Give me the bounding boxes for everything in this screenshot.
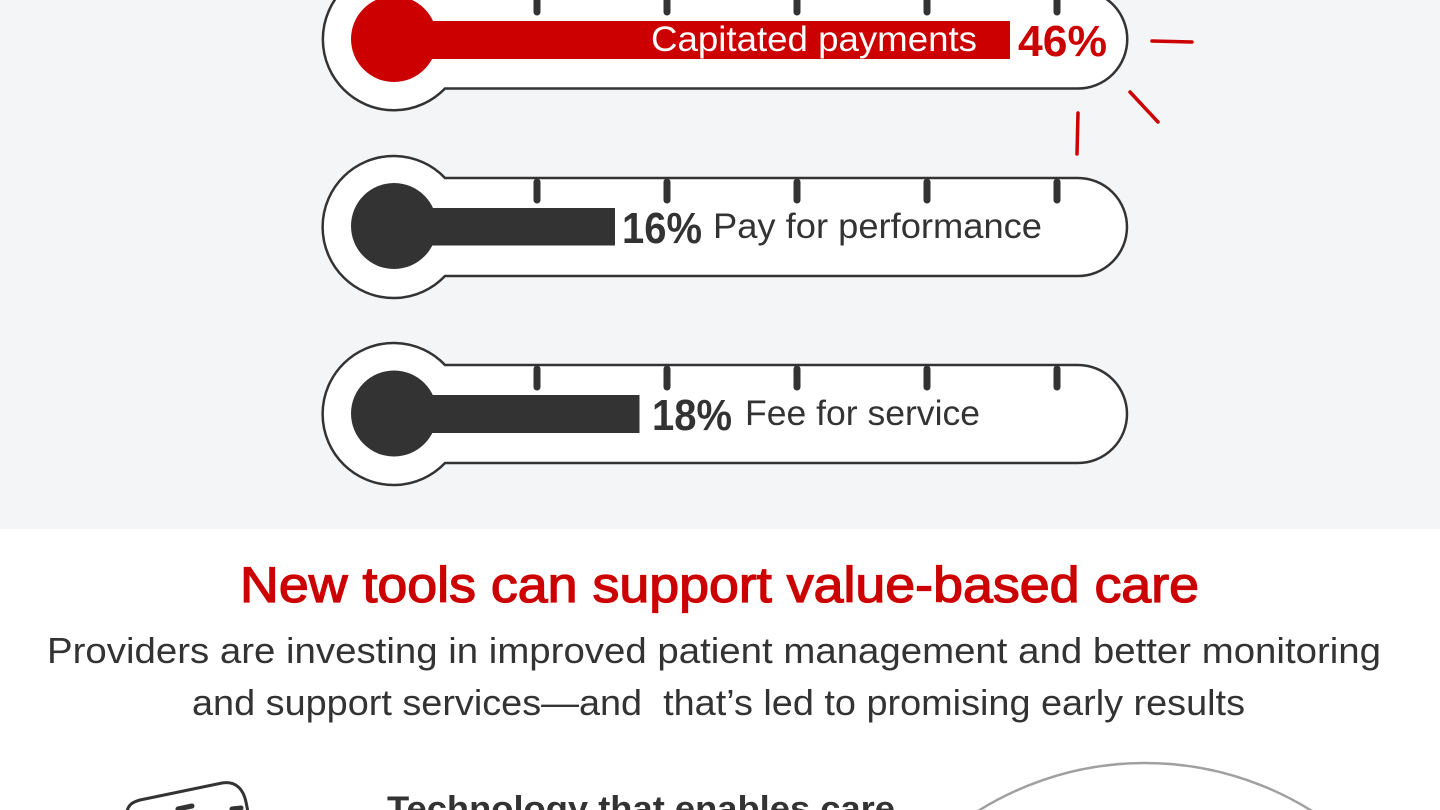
thermometer: fee for service 18% bbox=[323, 343, 1127, 485]
thermometer: capitated payments 46% bbox=[323, 0, 1127, 110]
text block: intro: Providers are investing in improved patient management and better monitoring bbox=[47, 630, 1381, 671]
text block: intro: and support services—and that’s led to promising early results bbox=[192, 682, 1245, 723]
circle outline bbox=[831, 763, 1440, 810]
text block: intro bbox=[47, 630, 1381, 723]
thermometer: fee for service 18%: Fee for service bbox=[745, 394, 980, 433]
icon: red emphasis rays bbox=[1077, 41, 1192, 154]
thermometer: pay for performance 16%: 16% bbox=[622, 204, 702, 253]
heading: New tools can support value-based care bbox=[240, 557, 1199, 613]
thermometer: pay for performance 16%: Pay for performance bbox=[713, 207, 1042, 246]
panel: grey thermometer background bbox=[0, 0, 1440, 529]
thermometer: capitated payments 46%: 46% bbox=[1018, 17, 1107, 66]
thermometer: capitated payments 46%: Capitated payments bbox=[651, 20, 977, 59]
thermometer: fee for service 18%: 18% bbox=[652, 391, 732, 440]
icon: tilted card bbox=[127, 783, 248, 810]
thermometer: pay for performance 16% bbox=[323, 156, 1127, 298]
